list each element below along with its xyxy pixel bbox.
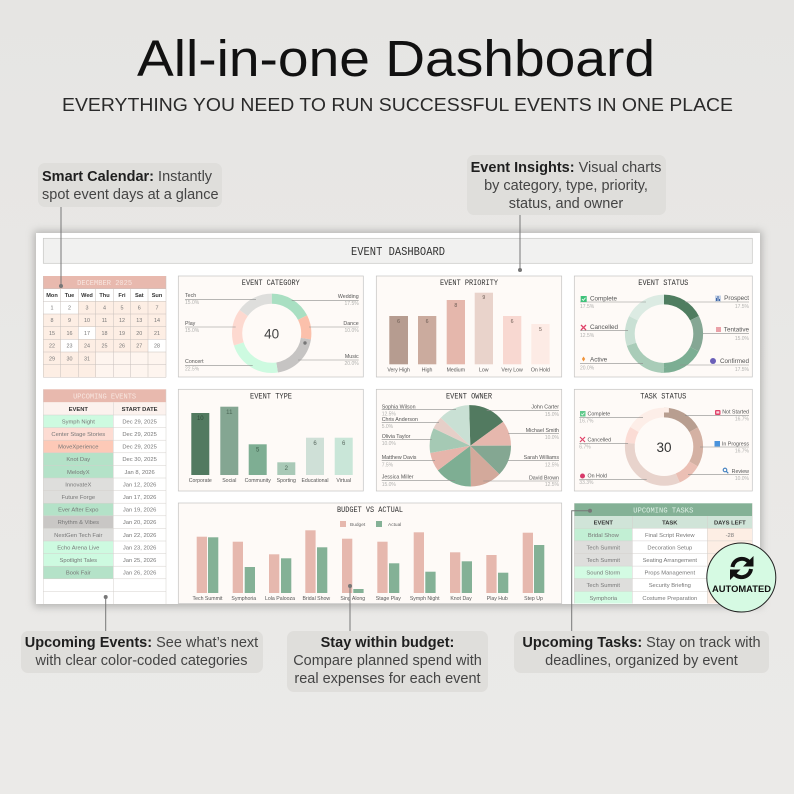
arrow: upcoming events leader bbox=[104, 595, 108, 631]
table: upcoming tasks: Decoration Setup bbox=[647, 545, 692, 551]
bar chart: event priority: 5 bbox=[539, 327, 542, 333]
panel: calendar: 15 bbox=[49, 331, 55, 337]
panel: event status: 17.5% bbox=[735, 367, 750, 373]
legend bbox=[340, 521, 401, 528]
panel: event priority bbox=[376, 276, 562, 377]
bar chart: event priority: High bbox=[422, 368, 433, 374]
panel: event status: 17.5% bbox=[735, 304, 750, 310]
icon: confirmed bbox=[710, 358, 716, 364]
bar chart: event priority bbox=[387, 293, 550, 374]
callout: smart calendar bbox=[38, 163, 222, 207]
icon: active bbox=[582, 356, 585, 362]
dashboard title bar bbox=[43, 238, 752, 263]
callout: stay within budget: real expenses for each event bbox=[294, 671, 481, 687]
panel: task status: 6.7% bbox=[579, 444, 591, 450]
panel: task status: 30 bbox=[656, 440, 672, 455]
callout: stay within budget: Stay within budget: bbox=[321, 635, 454, 651]
table: upcoming tasks: Security Briefing bbox=[649, 583, 691, 589]
icon: not started bbox=[715, 410, 720, 415]
callout: upcoming tasks: Upcoming Tasks: Stay on track with bbox=[522, 635, 761, 651]
panel: event status: 15.0% bbox=[735, 336, 750, 342]
panel: task status: 16.7% bbox=[735, 416, 750, 422]
table: upcoming tasks: Final Script Review bbox=[645, 533, 695, 539]
panel: calendar: 16 bbox=[66, 331, 72, 337]
table: upcoming tasks: Seating Arrangement bbox=[643, 558, 697, 564]
panel: event status: Cancelled bbox=[590, 324, 619, 331]
panel: budget vs actual: BUDGET VS ACTUAL bbox=[337, 506, 403, 515]
bar chart: event priority: 6 bbox=[426, 319, 429, 325]
bar chart: budget vs actual: Play Hub bbox=[487, 596, 508, 602]
table: upcoming events: START DATE bbox=[122, 407, 158, 413]
bar chart: event type: Sporting bbox=[277, 478, 296, 484]
bar chart: budget vs actual: Tech Summit bbox=[193, 596, 223, 602]
panel: calendar: 22 bbox=[49, 344, 55, 350]
table: upcoming tasks: Props Management bbox=[645, 571, 695, 577]
panel: task status: TASK STATUS bbox=[640, 392, 686, 402]
panel: task status: Not Started bbox=[722, 410, 749, 416]
callout: upcoming events: Upcoming Events: See what’s next bbox=[25, 635, 258, 651]
callout: upcoming events: with clear color-coded categories bbox=[35, 653, 247, 669]
panel: task status: Cancelled bbox=[588, 438, 611, 444]
bar chart: budget vs actual: Lola Palooza bbox=[265, 596, 295, 602]
bar chart: event type bbox=[189, 407, 353, 484]
donut: event category bbox=[237, 299, 306, 368]
bar chart: event priority: On Hold bbox=[531, 368, 550, 374]
panel: calendar: 21 bbox=[154, 331, 160, 337]
bar chart: event type: Social bbox=[222, 478, 236, 484]
table: upcoming events: Spotlight Tales bbox=[59, 558, 97, 564]
table: upcoming events: Knot Day bbox=[66, 457, 90, 463]
bar chart: budget vs actual: Stage Play bbox=[376, 596, 401, 602]
callout: stay within budget bbox=[287, 631, 488, 692]
panel: event category: Play bbox=[185, 321, 196, 327]
callout: event insights: by category, type, priority, bbox=[484, 178, 648, 194]
panel: calendar: 31 bbox=[84, 356, 90, 362]
donut: task status bbox=[630, 412, 698, 481]
panel: event category: Wedding bbox=[338, 294, 359, 300]
panel: event category: Tech bbox=[185, 293, 196, 299]
panel: event status: 17.5% bbox=[580, 304, 595, 310]
icon: prospect bbox=[715, 296, 721, 302]
panel: calendar bbox=[43, 276, 166, 377]
arrow: upcoming tasks leader bbox=[572, 509, 592, 631]
panel: event category: 17.5% bbox=[345, 301, 359, 307]
panel: task status: Complete bbox=[588, 412, 610, 418]
panel: calendar: 5 bbox=[120, 306, 124, 312]
table: upcoming tasks: Tech Summit bbox=[587, 558, 620, 564]
subtitle: EVERYTHING YOU NEED TO RUN SUCCESSFUL EVENTS IN ONE PLACE bbox=[62, 94, 733, 115]
callout: smart calendar: Smart Calendar: Instantly bbox=[42, 169, 213, 185]
panel: event status: 20.0% bbox=[580, 366, 595, 372]
bar chart: budget vs actual: Bridal Show bbox=[302, 596, 330, 602]
panel: calendar: 7 bbox=[156, 306, 158, 312]
legend: Budget bbox=[350, 522, 366, 528]
table: upcoming events: Dec 29, 2025 bbox=[122, 420, 157, 426]
table: upcoming events: MoveXperience bbox=[58, 445, 98, 451]
table: upcoming events: UPCOMING EVENTS bbox=[73, 394, 136, 402]
panel: task status: In Progress bbox=[722, 441, 749, 447]
panel: calendar: 3 bbox=[86, 306, 88, 312]
bar chart: budget vs actual: Symphoria bbox=[231, 596, 256, 602]
bar chart: event priority: Medium bbox=[447, 368, 465, 374]
dashboard title bar: EVENT DASHBOARD bbox=[351, 246, 445, 259]
panel: calendar: 17 bbox=[84, 331, 90, 337]
panel: event category: EVENT CATEGORY bbox=[242, 279, 300, 288]
panel: calendar: 11 bbox=[102, 318, 107, 324]
panel: event owner: EVENT OWNER bbox=[446, 392, 492, 402]
arrow: smart calendar leader bbox=[59, 207, 63, 288]
panel: event owner: 12.5% bbox=[545, 462, 560, 468]
panel: event status: Prospect bbox=[724, 295, 749, 302]
panel: event owner: 5.0% bbox=[382, 424, 394, 430]
callout: event insights: Event Insights: Visual charts bbox=[471, 160, 661, 176]
panel: event status bbox=[574, 276, 752, 377]
panel: event category: 20.0% bbox=[345, 361, 359, 367]
dashboard shadow bbox=[34, 231, 762, 607]
panel: event status: Tentative bbox=[724, 327, 749, 334]
panel: calendar: 14 bbox=[154, 318, 160, 324]
panel: event category bbox=[178, 276, 363, 377]
bar chart: event type: 6 bbox=[342, 441, 346, 447]
table: upcoming events: Center Stage Stories bbox=[51, 432, 105, 438]
table: upcoming events: Dec 29, 2025 bbox=[122, 445, 157, 451]
callout: upcoming tasks: deadlines, organized by event bbox=[545, 653, 738, 669]
panel: event owner: Jessica Miller bbox=[382, 475, 414, 481]
icon: complete bbox=[581, 296, 587, 302]
badge: automated bbox=[707, 543, 776, 612]
callout: upcoming events bbox=[21, 631, 263, 673]
arrow: budget leader bbox=[348, 584, 352, 631]
panel: event owner: 15.0% bbox=[382, 482, 396, 488]
panel: task status bbox=[574, 389, 752, 491]
panel: calendar: 10 bbox=[84, 318, 90, 324]
panel: event owner: Chris Anderson bbox=[382, 417, 418, 423]
panel: event owner bbox=[376, 389, 562, 491]
bar chart: budget vs actual: Sing Along bbox=[340, 596, 365, 602]
panel: calendar: 2 bbox=[68, 306, 71, 312]
table: upcoming events: EVENT bbox=[69, 407, 88, 413]
pie chart: event owner bbox=[450, 425, 491, 466]
panel: calendar: Sun bbox=[152, 293, 163, 299]
table: upcoming tasks: Costume Preparation bbox=[642, 596, 697, 602]
panel: event type: EVENT TYPE bbox=[250, 392, 292, 402]
panel: task status: Review bbox=[732, 469, 749, 475]
panel: calendar: 4 bbox=[103, 306, 106, 312]
panel: task status: 10.0% bbox=[735, 476, 750, 482]
panel: calendar: 30 bbox=[66, 356, 72, 362]
donut: event status bbox=[630, 300, 698, 368]
table: upcoming events: Dec 30, 2025 bbox=[122, 457, 157, 463]
bar chart: event priority: 6 bbox=[397, 319, 400, 325]
panel: calendar: 26 bbox=[119, 344, 125, 350]
panel: event owner: Michael Smith bbox=[526, 428, 559, 434]
panel: event category: 22.5% bbox=[185, 366, 200, 372]
panel: event owner: 12.5% bbox=[382, 412, 396, 418]
panel: event owner: Sarah Williams bbox=[524, 455, 559, 461]
table: upcoming events: Jan 26, 2026 bbox=[123, 571, 156, 577]
panel: event owner: David Brown bbox=[529, 475, 559, 481]
panel: calendar: 27 bbox=[136, 344, 142, 350]
table: upcoming tasks: Symphoria bbox=[589, 596, 618, 602]
panel: event status: Complete bbox=[590, 296, 617, 302]
panel: task status: 16.7% bbox=[735, 448, 750, 454]
panel: event status: Confirmed bbox=[720, 358, 749, 365]
icon: task cancelled bbox=[580, 437, 585, 442]
panel: calendar: 23 bbox=[66, 344, 72, 350]
table: upcoming tasks bbox=[574, 503, 752, 604]
table: upcoming tasks: UPCOMING TASKS bbox=[633, 508, 693, 516]
panel: calendar: Sat bbox=[135, 293, 144, 299]
bar chart: event type: 2 bbox=[285, 466, 289, 472]
table: upcoming events: Future Forge bbox=[62, 495, 95, 501]
table: upcoming tasks: DAYS LEFT bbox=[714, 520, 746, 526]
panel: calendar: 12 bbox=[119, 318, 125, 324]
bar chart: budget vs actual: Knot Day bbox=[450, 596, 472, 602]
table: upcoming tasks: Tech Summit bbox=[587, 545, 620, 551]
table: upcoming events: NextGen Tech Fair bbox=[54, 533, 102, 539]
panel: event owner: 7.5% bbox=[382, 462, 394, 468]
panel: event owner: Sophia Wilson bbox=[382, 404, 416, 410]
table: upcoming events: Rhythm & Vibes bbox=[58, 520, 99, 526]
bar chart: budget vs actual: Symph Night bbox=[410, 596, 440, 602]
panel: event owner: 10.0% bbox=[382, 441, 396, 447]
table: upcoming tasks: -28 bbox=[726, 533, 734, 539]
panel: event status: Active bbox=[590, 356, 608, 364]
table: upcoming events: InnovateX bbox=[65, 482, 91, 488]
table: upcoming events: Ever After Expo bbox=[58, 508, 98, 514]
arrow: event insights leader bbox=[518, 215, 522, 272]
bar chart: budget vs actual: Step Up bbox=[524, 596, 543, 602]
bar chart: event priority: 9 bbox=[482, 295, 485, 301]
table: upcoming tasks: Bridal Show bbox=[588, 533, 620, 539]
panel: calendar: 29 bbox=[49, 356, 55, 362]
title: All-in-one Dashboard bbox=[137, 30, 655, 87]
panel: task status: On Hold bbox=[588, 474, 607, 480]
table: upcoming tasks: EVENT bbox=[594, 520, 613, 526]
callout: event insights: status, and owner bbox=[509, 196, 623, 212]
panel: calendar: Wed bbox=[81, 293, 93, 299]
callout: upcoming tasks bbox=[514, 631, 769, 673]
panel: event owner: 12.5% bbox=[545, 482, 560, 488]
icon: sync arrows bbox=[730, 556, 754, 580]
table: upcoming events: Echo Arena Live bbox=[57, 545, 99, 551]
panel: calendar: 1 bbox=[50, 306, 54, 312]
panel: event owner: Matthew Davis bbox=[382, 455, 417, 461]
panel: calendar: Fri bbox=[118, 293, 126, 299]
callout: smart calendar: spot event days at a glance bbox=[42, 187, 219, 203]
dashboard sheet bbox=[36, 233, 760, 604]
bar chart: event type: Educational bbox=[301, 478, 329, 484]
callout: stay within budget: Compare planned spend with bbox=[293, 653, 482, 669]
panel: event category: 10.0% bbox=[345, 328, 359, 334]
bar chart: event type: 11 bbox=[226, 410, 233, 416]
panel: event owner: Olivia Taylor bbox=[382, 434, 411, 440]
icon: tentative bbox=[716, 327, 721, 332]
bar chart: event type: 5 bbox=[256, 448, 260, 454]
table: upcoming events: Jan 19, 2026 bbox=[123, 508, 156, 514]
icon: cancelled bbox=[581, 325, 586, 330]
panel: calendar: 8 bbox=[50, 318, 54, 324]
table: upcoming tasks: Tech Summit bbox=[587, 583, 620, 589]
table: upcoming events: Jan 23, 2026 bbox=[123, 545, 156, 551]
table: upcoming events: Jan 20, 2026 bbox=[123, 520, 156, 526]
panel: event category: 15.0% bbox=[185, 328, 200, 334]
panel: calendar: 19 bbox=[119, 331, 125, 337]
panel: event type bbox=[178, 389, 363, 491]
table: upcoming events: MelodyX bbox=[67, 470, 90, 476]
panel: event category: Music bbox=[345, 354, 359, 360]
panel: calendar: 24 bbox=[84, 344, 90, 350]
bar chart: event type: 10 bbox=[197, 416, 204, 422]
bar chart: event priority: 6 bbox=[511, 319, 514, 325]
table: upcoming events bbox=[43, 389, 166, 604]
table: upcoming events: Symph Night bbox=[62, 420, 95, 426]
panel: event owner: John Carter bbox=[531, 405, 559, 411]
panel: calendar: Thu bbox=[99, 293, 110, 299]
panel: calendar: 9 bbox=[68, 318, 71, 324]
bar chart: event priority: Low bbox=[479, 368, 489, 374]
panel: calendar: 25 bbox=[102, 344, 108, 350]
table: upcoming events: Jan 25, 2026 bbox=[123, 558, 156, 564]
icon: review bbox=[723, 468, 728, 473]
panel: calendar: 28 bbox=[154, 344, 160, 350]
bar chart: event type: 6 bbox=[313, 441, 317, 447]
panel: calendar: 18 bbox=[102, 331, 108, 337]
panel: task status: 33.3% bbox=[579, 480, 594, 486]
bar chart: event type: Virtual bbox=[336, 478, 351, 484]
icon: on hold bbox=[580, 474, 585, 478]
table: upcoming events: Book Fair bbox=[66, 571, 91, 577]
panel: event category: 40 bbox=[264, 326, 279, 342]
panel: event category: Concert bbox=[185, 359, 204, 365]
panel: event owner: 15.0% bbox=[545, 412, 560, 418]
bar chart: event priority: Very Low bbox=[501, 368, 523, 374]
panel: calendar: Tue bbox=[65, 293, 74, 299]
panel: event priority: EVENT PRIORITY bbox=[440, 279, 498, 288]
table: upcoming tasks: TASK bbox=[662, 520, 678, 526]
bar chart: event type: Community bbox=[245, 478, 271, 484]
panel: event category: 15.0% bbox=[185, 300, 200, 306]
table: upcoming tasks: Sound Storm bbox=[586, 571, 620, 577]
panel: calendar: 13 bbox=[136, 318, 142, 324]
legend: Actual bbox=[388, 522, 401, 528]
panel: task status: 16.7% bbox=[579, 418, 594, 424]
table: upcoming events: Jan 12, 2026 bbox=[123, 482, 156, 488]
table: upcoming events: Jan 17, 2026 bbox=[123, 495, 156, 501]
callout: event insights bbox=[467, 155, 666, 215]
panel: calendar: 20 bbox=[136, 331, 142, 337]
bar chart: event priority: Very High bbox=[387, 368, 410, 374]
panel: calendar: 6 bbox=[138, 306, 141, 312]
bar chart: event priority: 8 bbox=[454, 303, 457, 309]
panel: calendar: Mon bbox=[46, 293, 58, 299]
table: upcoming events: Dec 29, 2025 bbox=[122, 432, 157, 438]
bar chart: budget vs actual bbox=[193, 530, 544, 602]
panel: event category: Dance bbox=[343, 321, 359, 327]
panel: event owner: 10.0% bbox=[545, 435, 560, 441]
panel: calendar: DECEMBER 2025 bbox=[77, 280, 132, 288]
panel: event status: 12.5% bbox=[580, 333, 595, 339]
table: upcoming events: Jan 22, 2026 bbox=[123, 533, 156, 539]
table: upcoming events: Jan 8, 2026 bbox=[124, 470, 155, 476]
badge: automated: AUTOMATED bbox=[712, 584, 771, 595]
panel: budget vs actual bbox=[178, 503, 562, 604]
icon: in progress bbox=[714, 441, 720, 446]
icon: task complete bbox=[580, 411, 586, 416]
bar chart: event type: Corporate bbox=[189, 478, 212, 484]
panel: event status: EVENT STATUS bbox=[638, 279, 688, 288]
